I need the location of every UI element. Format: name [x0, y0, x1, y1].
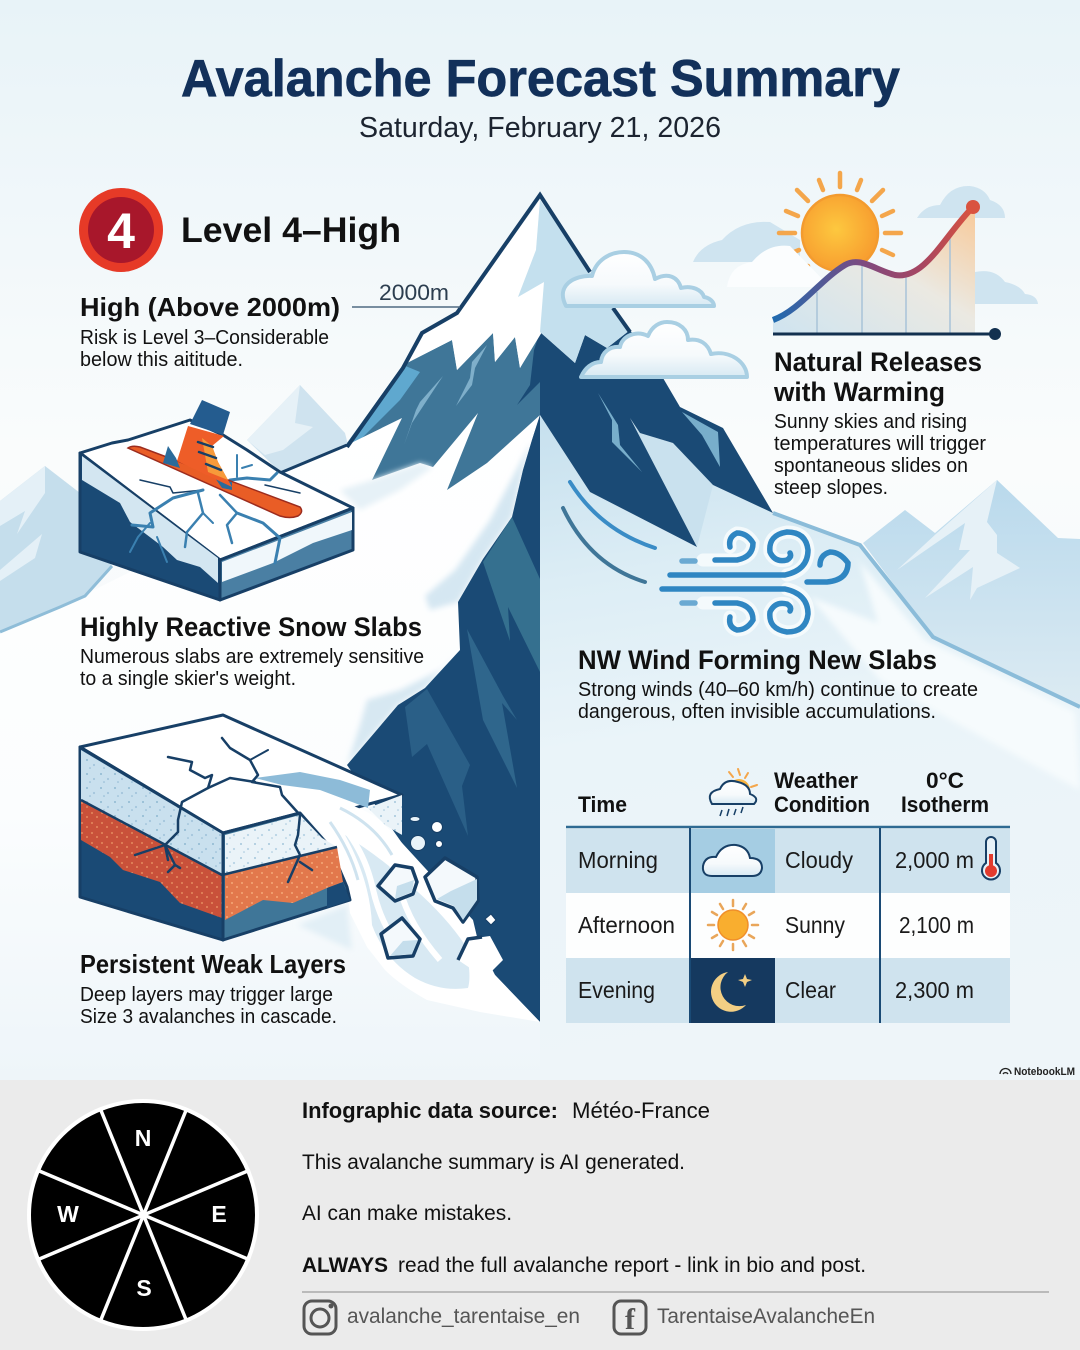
source credit: Infographic data source: [302, 1098, 558, 1123]
text block: natural releases: temperatures will trigger [774, 433, 986, 455]
avalanche flow [280, 793, 540, 1022]
table rows [566, 829, 1010, 893]
table text: 2,000 m [895, 847, 974, 873]
background mountains [0, 385, 1080, 862]
snow blocks [378, 858, 503, 978]
rock highlights on left face [404, 376, 443, 445]
icon: thermometer [982, 837, 1000, 879]
text block: high elevation [80, 292, 340, 371]
table header: Isotherm [901, 792, 989, 817]
source credit: read the full avalanche report - link in bio and post. [398, 1254, 866, 1277]
snow cap left [403, 200, 544, 370]
icon: snowpack layers with avalanche [80, 715, 540, 1022]
text block: high elevation: below this aititude. [80, 349, 243, 371]
table header: Time [578, 792, 627, 817]
compass rose: W [57, 1201, 79, 1227]
text block: natural releases [773, 347, 986, 499]
snow patch on right face [630, 418, 713, 547]
table text: Morning [578, 847, 658, 873]
text block: persistent weak layers [80, 949, 346, 1028]
social: facebook [614, 1301, 875, 1336]
table header: Condition [774, 792, 870, 817]
table text: Clear [785, 977, 836, 1003]
source credit: This avalanche summary is AI generated. [302, 1151, 685, 1174]
table text: 2,100 m [899, 912, 974, 938]
text block: natural releases: with Warming [773, 377, 945, 407]
boot [177, 426, 232, 487]
text block: natural releases: steep slopes. [774, 477, 888, 499]
blue ridge strip [347, 365, 420, 445]
crack opening [255, 772, 370, 808]
text block: NW wind: Strong winds (40–60 km/h) continue to create [578, 679, 978, 701]
white snow drift near wind [810, 550, 1080, 790]
flow shading [345, 835, 469, 989]
front cloud [727, 246, 830, 287]
text block: natural releases: spontaneous slides on [774, 455, 968, 477]
mountain [0, 195, 1080, 1080]
table text: Evening [578, 977, 655, 1003]
date subtitle: Saturday, February 21, 2026 [359, 112, 721, 144]
danger level badge [79, 188, 163, 272]
text block: NW wind: dangerous, often invisible accumulations. [578, 701, 936, 723]
chart: warming temperature curve with sun [693, 173, 1038, 340]
right face [223, 813, 350, 940]
table text [578, 847, 974, 1003]
snow cap right [518, 200, 630, 363]
social: facebook: f [625, 1303, 636, 1336]
icon: wind [563, 482, 848, 632]
table: weather by time of day [566, 768, 1010, 1023]
right ridge line [773, 513, 1080, 707]
social: instagram [304, 1301, 580, 1334]
column rules [689, 828, 691, 1023]
text block: NW wind: NW Wind Forming New Slabs [578, 645, 937, 675]
NotebookLM mark: NotebookLM [1014, 1066, 1075, 1078]
title: Avalanche Forecast Summary [181, 50, 900, 108]
rock highlights on right face [598, 393, 642, 472]
danger level badge: 4 [107, 203, 135, 259]
text block: high elevation: Risk is Level 3–Considerable [80, 327, 329, 349]
source credit: Météo-France [572, 1098, 710, 1123]
slab top [80, 715, 402, 833]
text block: natural releases: Sunny skies and rising [774, 411, 967, 433]
text block: reactive slabs: Numerous slabs are extremely sensitive [80, 646, 424, 668]
shaded snow bands [425, 440, 532, 610]
text block: NW wind [578, 645, 978, 723]
central rock facets [483, 517, 540, 672]
left lower ridge [280, 445, 347, 473]
right dark face [540, 330, 773, 547]
binding [163, 446, 180, 468]
text block: persistent weak layers: Deep layers may trigger large [80, 984, 333, 1006]
icon cell: night [690, 958, 775, 1023]
right snow slope [540, 415, 1080, 1080]
sun rays [779, 173, 901, 277]
page background [0, 0, 1080, 1080]
table text: Afternoon [578, 912, 675, 938]
table text: 2,300 m [895, 977, 974, 1003]
2000m marker: 2000m [379, 280, 449, 305]
table header: 0°C [926, 768, 964, 793]
area under curve [773, 207, 975, 333]
table header [578, 768, 989, 817]
icon: moon and star [711, 972, 752, 1012]
temperature curve [773, 207, 973, 320]
icon: sun behind rain cloud [710, 769, 757, 816]
left ridge edge [0, 566, 112, 632]
social: instagram: avalanche_tarentaise_en [347, 1305, 580, 1328]
left dark face [340, 332, 540, 500]
header rule [566, 826, 1010, 828]
compass rose: S [136, 1275, 152, 1301]
ski [128, 446, 302, 518]
text block: reactive slabs [80, 612, 424, 690]
ridge outline [347, 195, 590, 447]
text block: reactive slabs: Highly Reactive Snow Slabs [80, 612, 422, 642]
text block: high elevation: High (Above 2000m) [80, 292, 340, 322]
text block: persistent weak layers: Size 3 avalanches in cascade. [80, 1006, 337, 1028]
source credit [302, 1098, 866, 1277]
table header: Weather [774, 768, 858, 793]
source credit: ALWAYS [302, 1254, 388, 1277]
left lower snow slope [0, 413, 540, 1080]
table text: Cloudy [785, 847, 853, 873]
table text: Sunny [785, 912, 845, 938]
block shading [390, 879, 477, 956]
source credit: AI can make mistakes. [302, 1202, 512, 1225]
text block: persistent weak layers: Persistent Weak Layers [80, 949, 346, 979]
icon: sun [708, 900, 758, 950]
clouds over the peak [563, 252, 747, 377]
2000m marker [352, 280, 460, 307]
footer panel [0, 1080, 1080, 1350]
small debris [410, 816, 496, 925]
text block: natural releases: Natural Releases [774, 347, 982, 377]
compass rose [29, 1101, 257, 1329]
back clouds [917, 186, 1005, 218]
ridge outline right [613, 308, 630, 332]
icon cell: cloud [691, 829, 775, 893]
cracks [135, 738, 312, 882]
social: facebook: TarentaiseAvalancheEn [657, 1305, 875, 1328]
compass rose: N [135, 1125, 151, 1151]
icon: cloud [703, 845, 762, 876]
left face [80, 747, 223, 940]
compass rose: E [211, 1201, 227, 1227]
level heading: Level 4–High [181, 211, 401, 250]
axis [773, 332, 995, 336]
icon: cracked snow slab with ski boot [80, 400, 353, 600]
text block: reactive slabs: to a single skier's weight. [80, 668, 296, 690]
central dark rock [347, 415, 540, 1022]
sun disc [802, 195, 878, 271]
